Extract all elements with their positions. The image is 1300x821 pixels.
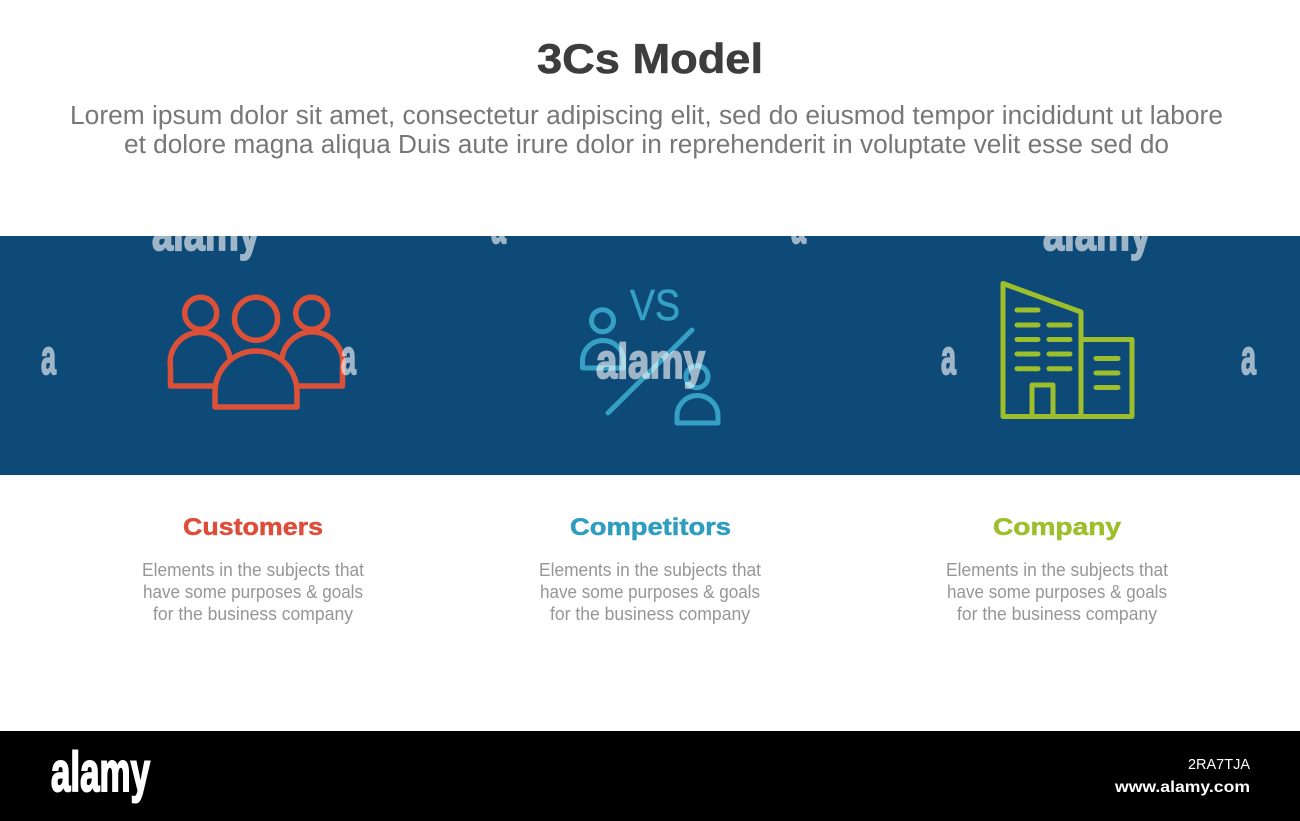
band watermarks: a [941, 331, 956, 385]
icon: competitors versus: VS [630, 281, 680, 330]
band watermarks: a [1241, 331, 1256, 385]
panel: competitors text [539, 514, 761, 624]
band watermarks: a [791, 200, 806, 254]
icon: customers group [170, 297, 343, 407]
panel: customers text [142, 514, 364, 624]
band watermarks: a [491, 200, 506, 254]
band watermarks: a [41, 331, 56, 385]
description: competitors: for the business company [550, 604, 750, 624]
footer logo: alamy [51, 740, 150, 803]
subtitle text block: Lorem ipsum dolor sit amet, consectetur adipiscing elit, sed do eiusmod tempor incididunt ut labore [70, 102, 1223, 130]
band watermarks [41, 236, 1257, 389]
description: competitors [539, 560, 761, 624]
footer bar [0, 731, 1300, 821]
panel: company text [946, 514, 1168, 624]
description: competitors: Elements in the subjects that [539, 560, 761, 580]
description: customers: have some purposes & goals [143, 582, 363, 602]
title: 3Cs Model [537, 35, 763, 82]
description: customers [142, 560, 364, 624]
footer url: www.alamy.com [1114, 779, 1250, 796]
subtitle text block: et dolore magna aliqua Duis aute irure dolor in reprehenderit in voluptate velit esse sed do [124, 131, 1169, 159]
description: customers: Elements in the subjects that [142, 560, 364, 580]
description: customers: for the business company [153, 604, 353, 624]
heading: competitors: Competitors [570, 514, 731, 541]
band watermarks: alamy [1043, 207, 1151, 261]
subtitle text block [70, 102, 1223, 159]
band watermarks: alamy [596, 335, 705, 389]
icon: competitors versus [582, 281, 718, 423]
icon: company building [1003, 284, 1132, 416]
band watermarks: alamy [152, 207, 260, 261]
description: company: for the business company [957, 604, 1157, 624]
description: competitors: have some purposes & goals [540, 582, 760, 602]
heading: customers: Customers [183, 514, 323, 541]
description: company [946, 560, 1168, 624]
band watermarks: a [341, 331, 356, 385]
description: company: Elements in the subjects that [946, 560, 1168, 580]
image id: 2RA7TJA [1188, 757, 1250, 773]
description: company: have some purposes & goals [947, 582, 1167, 602]
panel: dark blue band [0, 236, 1300, 475]
heading: company: Company [993, 514, 1122, 541]
